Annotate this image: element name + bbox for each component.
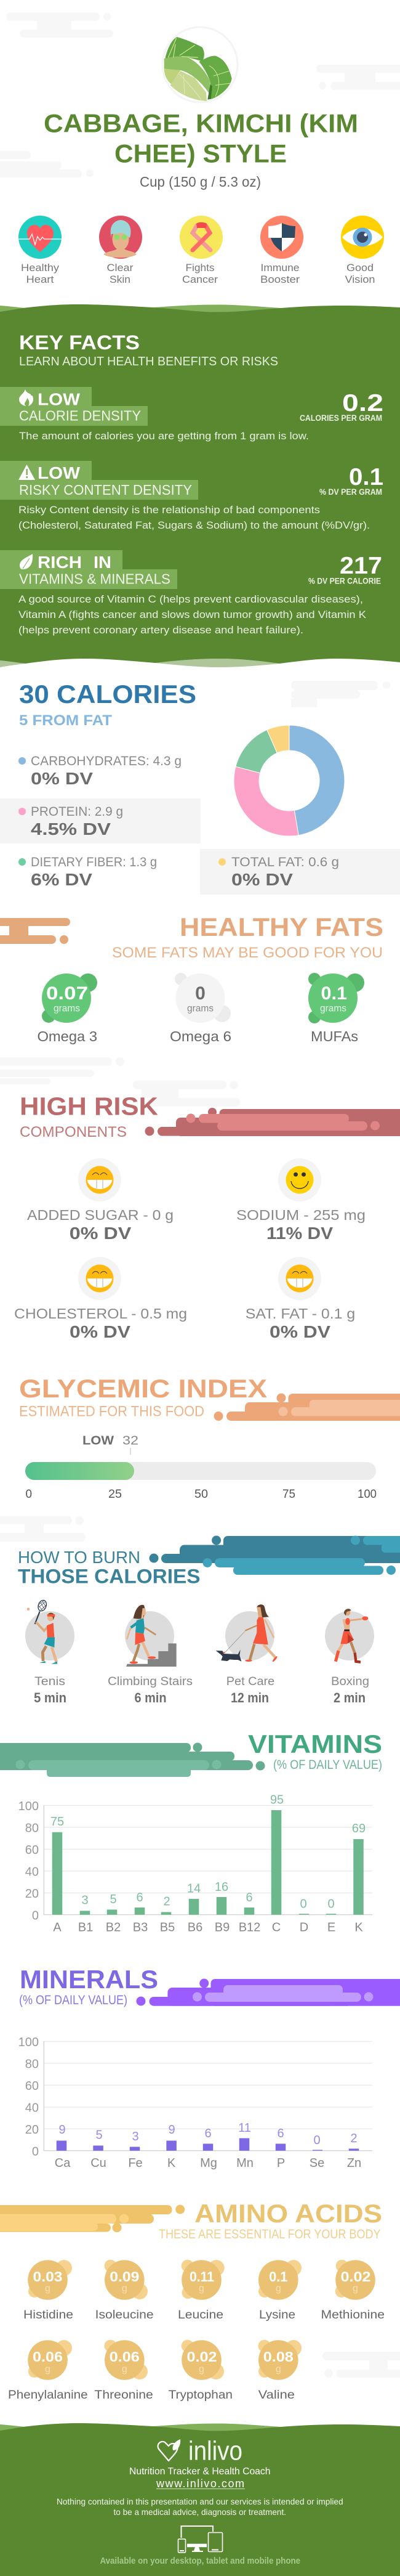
gauge: glycemic index: 100 <box>358 1488 377 1501</box>
amino: lysine: g <box>276 2283 281 2294</box>
donut chart: macronutrients <box>234 725 345 836</box>
bar chart: minerals: 9 <box>168 2123 175 2137</box>
activity: climbing stairs <box>108 1605 193 1705</box>
risk: cholesterol: 0% DV <box>70 1322 130 1341</box>
bar chart: minerals: 80 <box>25 2058 39 2071</box>
stat: omega 3: 0.07 <box>46 983 88 1004</box>
subheading: vitamins daily value: (% OF DAILY VALUE) <box>273 1758 382 1772</box>
amino: isoleucine: g <box>122 2283 127 2294</box>
benefit: clear skin: Skin <box>110 274 130 285</box>
amino: isoleucine: Isoleucine <box>95 2309 154 2322</box>
footer logo: inlivo <box>158 2436 242 2466</box>
heading: healthy fats: HEALTHY FATS <box>180 912 383 941</box>
bar chart: vitamins: B12 <box>239 1920 260 1934</box>
legend: protein <box>0 798 201 843</box>
stat: MUFAs <box>308 973 364 1044</box>
amino: threonine: g <box>122 2364 127 2375</box>
activity: climbing stairs: 6 min <box>134 1690 166 1705</box>
legend: carbohydrates <box>18 754 182 788</box>
amino: valine: Valine <box>258 2389 295 2402</box>
amino: threonine: 0.06 <box>110 2349 140 2365</box>
stat: omega 3 <box>37 973 97 1044</box>
amino: histidine: 0.03 <box>33 2269 63 2285</box>
bar chart: vitamins: 60 <box>25 1843 39 1857</box>
risk: added sugar: ADDED SUGAR - 0 g <box>27 1207 174 1223</box>
decorative band: burn <box>149 1535 400 1575</box>
fact: low calorie density: LOW <box>38 389 81 409</box>
bar chart: minerals: Cu <box>90 2156 106 2170</box>
footer disclaimer: to be a medical advice, diagnosis or treatment. <box>113 2507 286 2517</box>
panel: footer background <box>0 2423 400 2576</box>
legend: dietary fiber <box>18 855 157 889</box>
risk: added sugar <box>27 1158 174 1243</box>
heading: amino acids: AMINO ACIDS <box>194 2199 382 2228</box>
gauge: glycemic index: 50 <box>194 1488 208 1501</box>
fact: low calorie density: CALORIES PER GRAM <box>300 413 382 423</box>
legend: protein: PROTEIN: 2.9 g <box>31 805 123 819</box>
amino: valine <box>258 2340 302 2402</box>
benefit: good vision: Good <box>346 262 374 274</box>
activity: tennis <box>25 1599 74 1705</box>
decorative band: glycemic index <box>214 1394 400 1421</box>
risk: cholesterol <box>14 1257 187 1341</box>
bar chart: vitamins: 0 <box>327 1898 335 1911</box>
bar chart: minerals: K <box>167 2156 176 2170</box>
fact: rich in vitamins and minerals: % DV PER CALORIE <box>308 577 381 585</box>
fact: rich in vitamins and minerals <box>0 550 382 636</box>
activity: climbing stairs: Climbing Stairs <box>108 1675 193 1688</box>
fact: rich in vitamins and minerals: VITAMINS & MINERALS <box>19 571 170 587</box>
stat: omega 6: 0 <box>195 983 206 1004</box>
bar chart: vitamins: 100 <box>18 1800 39 1813</box>
stat: omega 3: Omega 3 <box>37 1028 97 1044</box>
heading: those calories: THOSE CALORIES <box>18 1565 201 1587</box>
bar chart: vitamins <box>18 1794 372 1934</box>
bar chart: vitamins: 6 <box>246 1891 253 1904</box>
bar chart: minerals: 6 <box>204 2127 212 2140</box>
stat: omega 6: Omega 6 <box>170 1028 231 1044</box>
footer disclaimer <box>57 2497 343 2517</box>
bar chart: minerals: Mg <box>200 2156 217 2170</box>
benefit: healthy heart: Heart <box>26 274 54 285</box>
bar chart: minerals: 3 <box>132 2130 139 2143</box>
amino: histidine <box>23 2260 73 2322</box>
bar chart: vitamins: B9 <box>215 1920 230 1934</box>
activity: tennis: Tenis <box>34 1675 65 1688</box>
amino: histidine: g <box>45 2283 50 2294</box>
amino: phenylalanine: 0.06 <box>33 2349 63 2365</box>
amino: tryptophan: Tryptophan <box>169 2389 233 2402</box>
footer availability note: Available on your desktop, tablet and mobile phone <box>100 2556 300 2566</box>
fact: low calorie density: 0.2 <box>342 390 383 416</box>
legend: total fat <box>200 849 400 895</box>
bar chart: minerals: 11 <box>238 2121 251 2135</box>
bar chart: minerals: 6 <box>277 2127 284 2140</box>
benefit: healthy heart: Healthy <box>21 262 60 274</box>
amino: tryptophan <box>169 2340 233 2402</box>
heading: minerals: MINERALS <box>20 1965 158 1994</box>
heading: key facts: KEY FACTS <box>19 331 140 354</box>
amino: valine: 0.08 <box>263 2349 294 2365</box>
decorative band: amino acids <box>0 2204 185 2232</box>
fact: low risky content density: % DV PER GRAM <box>319 487 382 497</box>
stat: MUFAs: grams <box>320 1003 346 1014</box>
footer disclaimer: Nothing contained in this presentation and our services is intended or implied <box>57 2497 343 2506</box>
bar chart: minerals: 20 <box>25 2123 39 2137</box>
bar chart: vitamins: B2 <box>106 1920 121 1934</box>
bar chart: minerals <box>18 2036 372 2170</box>
bar chart: minerals: 5 <box>95 2129 103 2142</box>
amino: methionine <box>321 2260 385 2322</box>
legend: carbohydrates: 0% DV <box>31 769 93 788</box>
subheading: healthy fats: SOME FATS MAY BE GOOD FOR YOU <box>112 945 383 961</box>
activity: boxing: Boxing <box>331 1675 369 1688</box>
bar chart: vitamins: 2 <box>163 1895 170 1909</box>
stat: MUFAs: 0.1 <box>321 983 347 1004</box>
bar chart: minerals: P <box>277 2156 285 2170</box>
title: CABBAGE, KIMCHI (KIM <box>44 108 358 138</box>
fact: low calorie density: The amount of calories you are getting from 1 gram is low. <box>19 430 309 442</box>
gauge: glycemic index: 75 <box>282 1488 295 1501</box>
amino: isoleucine: 0.09 <box>110 2269 139 2285</box>
subheading: estimated for this food: ESTIMATED FOR THIS FOOD <box>19 1404 204 1420</box>
gauge: glycemic index: 32 <box>122 1434 138 1448</box>
amino: isoleucine <box>95 2260 154 2322</box>
benefit: fights cancer: Fights <box>186 262 214 274</box>
bar chart: vitamins: 3 <box>81 1894 89 1908</box>
benefit: good vision <box>341 216 384 285</box>
amino: lysine <box>258 2260 302 2322</box>
heading: vitamins: VITAMINS <box>248 1729 382 1758</box>
bar chart: minerals: Fe <box>128 2156 143 2170</box>
bar chart: minerals: 40 <box>25 2101 39 2115</box>
amino: phenylalanine <box>8 2340 88 2402</box>
bar chart: vitamins: E <box>327 1920 335 1934</box>
risk: sodium: SODIUM - 255 mg <box>236 1207 366 1223</box>
risk: sodium: 11% DV <box>266 1224 333 1243</box>
bar chart: minerals: Se <box>310 2156 324 2170</box>
activity: pet care: Pet Care <box>226 1675 274 1688</box>
stat: omega 3: grams <box>54 1003 80 1014</box>
bar chart: vitamins: 69 <box>352 1822 366 1835</box>
bar chart: vitamins: 95 <box>270 1794 284 1807</box>
legend: dietary fiber: 6% DV <box>31 870 92 889</box>
bar chart: minerals: 100 <box>18 2036 39 2049</box>
bar chart: vitamins: 75 <box>50 1815 64 1829</box>
footer logo: inlivo: inlivo <box>188 2436 242 2466</box>
heading: how to burn: HOW TO BURN <box>18 1548 140 1567</box>
bar chart: vitamins: 40 <box>25 1866 39 1879</box>
fact: rich in vitamins and minerals: 217 <box>340 553 382 579</box>
benefit: immune booster: Immune <box>261 262 299 274</box>
fact: rich in vitamins and minerals: Vitamin A (fights cancer and slows down tumor growth) and Vitamin K <box>18 609 367 620</box>
bar chart: vitamins: 0 <box>300 1898 307 1911</box>
bar chart: minerals: Ca <box>55 2156 71 2170</box>
bar chart: minerals: Zn <box>347 2156 361 2170</box>
fact: low calorie density: CALORIE DENSITY <box>19 408 141 424</box>
benefit: healthy heart <box>18 216 62 285</box>
bar chart: vitamins: 16 <box>215 1880 228 1894</box>
bar chart: vitamins: 0 <box>32 1909 39 1922</box>
icon: devices <box>178 2526 223 2553</box>
fact: rich in vitamins and minerals: A good source of Vitamin C (helps prevent cardiovascular diseases), <box>18 593 363 605</box>
gauge: glycemic index: 0 <box>26 1488 32 1501</box>
stat: MUFAs: MUFAs <box>311 1028 358 1044</box>
activity: pet care <box>216 1604 278 1705</box>
bar chart: minerals: 0 <box>32 2145 39 2159</box>
decorative band: minerals <box>137 1979 400 2006</box>
amino: phenylalanine: g <box>45 2364 50 2375</box>
fact: low risky content density: RISKY CONTENT DENSITY <box>19 482 192 498</box>
bar chart: vitamins: 20 <box>25 1887 39 1901</box>
legend: protein: 4.5% DV <box>31 819 111 839</box>
amino: leucine <box>178 2260 225 2322</box>
amino: leucine: Leucine <box>178 2309 223 2322</box>
bar chart: vitamins: B1 <box>78 1920 93 1934</box>
amino: lysine: Lysine <box>259 2309 295 2322</box>
fact: rich in vitamins and minerals: RICH <box>38 553 82 572</box>
amino: threonine: Threonine <box>94 2389 153 2402</box>
legend: dietary fiber: DIETARY FIBER: 1.3 g <box>31 855 157 869</box>
bar chart: minerals: 2 <box>350 2132 358 2145</box>
fact: low calorie density <box>0 387 383 442</box>
activity: boxing: 2 min <box>334 1690 366 1705</box>
bar chart: vitamins: A <box>53 1920 62 1934</box>
heading: 30 calories: 30 CALORIES <box>19 680 196 709</box>
risk: saturated fat: SAT. FAT - 0.1 g <box>246 1306 355 1322</box>
amino: histidine: Histidine <box>23 2309 73 2322</box>
subheading: key facts: LEARN ABOUT HEALTH BENEFITS OR RISKS <box>19 355 278 368</box>
gauge: glycemic index: 25 <box>108 1488 122 1501</box>
benefit: immune booster: Booster <box>260 274 300 285</box>
decorative band: healthy fats <box>0 918 70 944</box>
bar chart: vitamins: 80 <box>25 1821 39 1835</box>
bar chart: vitamins: D <box>300 1920 308 1934</box>
fact: rich in vitamins and minerals: (helps prevent coronary artery disease and heart failure). <box>18 624 303 636</box>
activity: boxing <box>325 1609 374 1705</box>
risk: saturated fat <box>246 1257 355 1341</box>
legend: total fat: TOTAL FAT: 0.6 g <box>231 855 339 869</box>
heading: high risk: HIGH RISK <box>20 1092 158 1120</box>
title: CHEE) STYLE <box>114 139 287 168</box>
benefit: fights cancer <box>180 216 223 285</box>
panel: key facts background <box>0 304 400 667</box>
stat: omega 6 <box>170 973 231 1044</box>
heading: glycemic index: GLYCEMIC INDEX <box>19 1374 267 1403</box>
gauge: glycemic index <box>25 1434 377 1501</box>
amino: methionine: Methionine <box>321 2309 385 2322</box>
risk: saturated fat: 0% DV <box>270 1322 330 1341</box>
bar chart: minerals: 0 <box>313 2134 321 2147</box>
subheading: 5 from fat: 5 FROM FAT <box>19 712 112 729</box>
gauge: glycemic index: LOW <box>82 1434 114 1448</box>
bar chart: vitamins: C <box>272 1920 281 1934</box>
serving size: Cup (150 g / 5.3 oz) <box>140 174 261 190</box>
footer tagline: Nutrition Tracker & Health Coach <box>129 2466 271 2477</box>
amino: leucine: 0.11 <box>190 2269 214 2285</box>
amino: phenylalanine: Phenylalanine <box>8 2389 88 2402</box>
bar chart: vitamins: 14 <box>187 1882 201 1896</box>
benefit: fights cancer: Cancer <box>182 274 218 285</box>
subheading: components: COMPONENTS <box>20 1124 127 1140</box>
amino: methionine: 0.02 <box>341 2269 370 2285</box>
bar chart: vitamins: B6 <box>188 1920 202 1934</box>
fact: low risky content density <box>0 461 383 531</box>
amino: tryptophan: 0.02 <box>187 2349 217 2365</box>
risk: sodium <box>236 1158 366 1243</box>
hero: cabbage image <box>162 27 238 102</box>
amino: threonine <box>94 2340 153 2402</box>
benefit: clear skin: Clear <box>107 262 134 274</box>
decorative band: high risk <box>145 1108 400 1136</box>
legend: total fat: 0% DV <box>231 870 293 889</box>
risk: cholesterol: CHOLESTEROL - 0.5 mg <box>14 1306 187 1322</box>
amino: valine: g <box>276 2364 281 2375</box>
amino: leucine: g <box>199 2283 204 2294</box>
fact: rich in vitamins and minerals: IN <box>94 553 111 572</box>
bar chart: minerals: Mn <box>236 2156 254 2170</box>
amino: methionine: g <box>353 2283 358 2294</box>
bar chart: vitamins: B3 <box>133 1920 148 1934</box>
fact: low risky content density: LOW <box>38 463 81 482</box>
stat: omega 6: grams <box>187 1003 214 1014</box>
subheading: minerals daily value: (% OF DAILY VALUE) <box>19 1993 127 2007</box>
bar chart: vitamins: K <box>354 1920 363 1934</box>
fact: low risky content density: 0.1 <box>349 464 383 490</box>
bar chart: vitamins: 5 <box>110 1893 117 1906</box>
decorative band: vitamins <box>0 1742 265 1777</box>
bar chart: vitamins: B5 <box>160 1920 175 1934</box>
footer link: www.inlivo.com <box>156 2477 244 2490</box>
activity: tennis: 5 min <box>34 1690 66 1705</box>
amino: tryptophan: g <box>199 2364 204 2375</box>
title <box>44 108 358 168</box>
fact: low risky content density: (Cholesterol, Saturated Fat, Sugars & Sodium) to the amount (%DV/gr). <box>18 519 370 531</box>
benefit: immune booster <box>260 216 303 285</box>
benefit: clear skin <box>99 216 142 285</box>
legend: carbohydrates: CARBOHYDRATES: 4.3 g <box>31 754 182 768</box>
bar chart: minerals: 60 <box>25 2079 39 2093</box>
activity: pet care: 12 min <box>231 1690 269 1705</box>
benefit: good vision: Vision <box>345 274 375 285</box>
bar chart: vitamins: 6 <box>136 1891 143 1904</box>
bar chart: minerals: 9 <box>58 2123 66 2137</box>
amino: lysine: 0.1 <box>269 2269 287 2285</box>
risk: added sugar: 0% DV <box>70 1224 132 1243</box>
fact: low risky content density: Risky Content density is the relationship of bad components <box>18 504 320 516</box>
